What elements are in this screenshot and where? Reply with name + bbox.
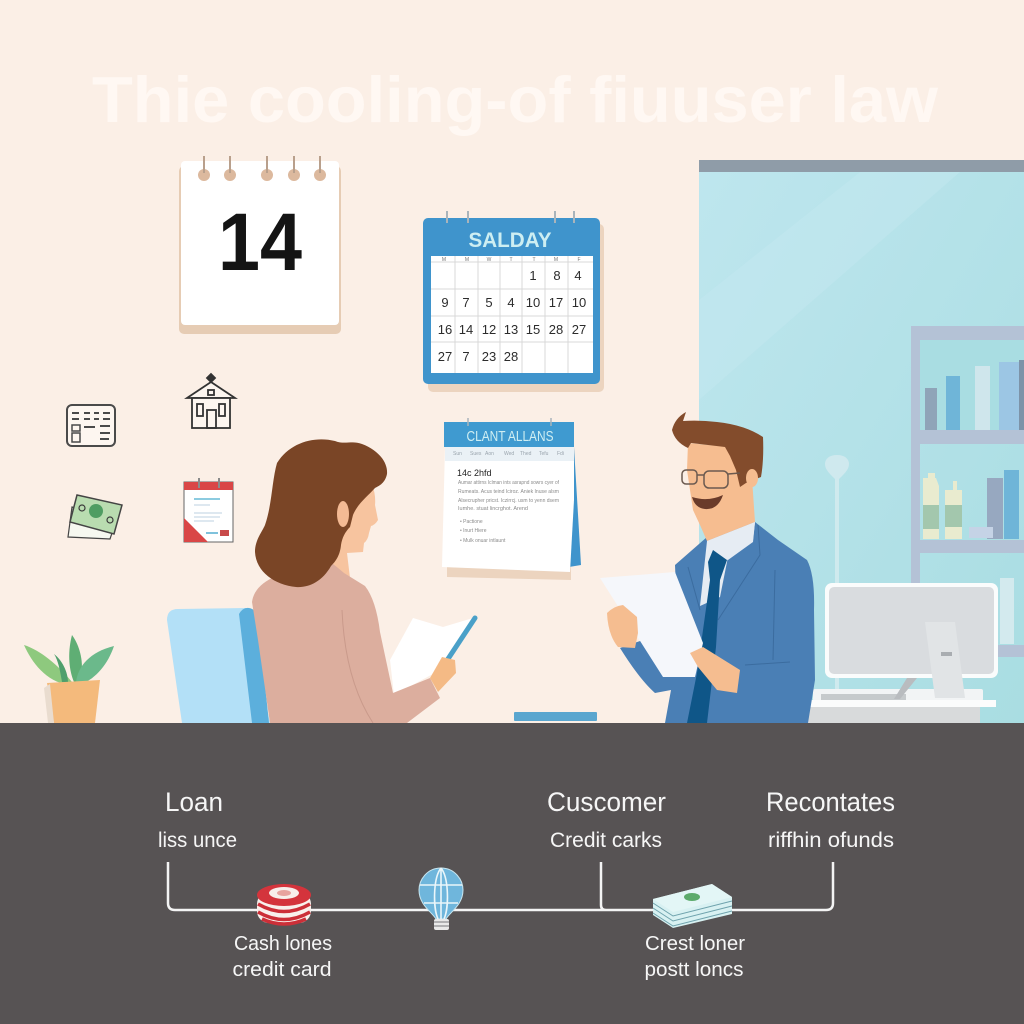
label: crest loans: Crest loner xyxy=(645,933,745,955)
weekday labels: M xyxy=(554,257,558,263)
head and neck xyxy=(687,443,755,541)
label: crest loans: postt loncs xyxy=(644,959,744,981)
label: customer: Credit carks xyxy=(550,829,662,852)
paper xyxy=(390,618,473,695)
ear xyxy=(337,501,349,527)
date numbers: 7 xyxy=(462,349,470,364)
note body text xyxy=(458,480,560,544)
weekday labels: T xyxy=(509,257,513,263)
weekday labels: Thed xyxy=(520,451,532,457)
date numbers: 4 xyxy=(574,268,582,283)
left hand xyxy=(607,605,638,648)
date numbers: 27 xyxy=(438,349,452,364)
note body text: • Pactione xyxy=(460,519,483,525)
label: customer xyxy=(547,787,666,852)
paper xyxy=(600,572,703,677)
date numbers: 27 xyxy=(572,322,586,337)
man xyxy=(600,412,815,723)
label: recontates xyxy=(766,787,895,852)
bookshelf xyxy=(911,326,1024,657)
label: cash loans: Cash lones xyxy=(234,933,332,955)
collar over neck xyxy=(707,522,755,560)
shirt collar xyxy=(700,522,755,606)
date numbers: 28 xyxy=(549,322,563,337)
calendar: Salday month grid: SALDAY xyxy=(468,229,552,252)
label: cash loans: credit card xyxy=(232,959,332,981)
date numbers: 23 xyxy=(482,349,496,364)
date numbers xyxy=(438,268,586,364)
label: loan: Loan xyxy=(165,787,223,817)
date numbers: 16 xyxy=(438,322,452,337)
weekday labels: T xyxy=(532,257,536,263)
date numbers: 17 xyxy=(549,295,563,310)
note body text: Aumar attirns Iclman ints asrapnd sowrs cyer of xyxy=(458,480,560,486)
date numbers: 15 xyxy=(526,322,540,337)
date numbers: 10 xyxy=(572,295,586,310)
date numbers: 8 xyxy=(553,268,561,283)
weekday labels: Sues xyxy=(470,451,482,457)
date numbers: 4 xyxy=(507,295,515,310)
office window background xyxy=(699,160,1024,723)
date numbers: 10 xyxy=(526,295,540,310)
date numbers: 7 xyxy=(462,295,470,310)
icon: red calendar xyxy=(184,478,233,542)
ear xyxy=(746,469,758,487)
weekday labels: M xyxy=(465,257,469,263)
hair xyxy=(255,439,387,587)
icon: red chip stack xyxy=(257,884,311,924)
calendar rings xyxy=(198,156,326,181)
date numbers: 1 xyxy=(529,268,537,283)
calendar: 14 days: 14 xyxy=(218,197,302,288)
label: crest loans xyxy=(644,933,745,981)
note body text: • Mulk onuar intlaunt xyxy=(460,538,506,544)
label: loan: liss unce xyxy=(158,829,237,852)
hand xyxy=(430,657,456,692)
label: loan xyxy=(158,787,237,852)
floor lamp xyxy=(825,455,849,690)
chair xyxy=(167,608,270,723)
label: customer: Cuscomer xyxy=(547,787,666,817)
computer monitor and desk xyxy=(786,583,998,723)
note body text: Rumeats. Acus teind Iciroz. Aniek Inuse alsm xyxy=(458,489,559,495)
note body text: Iumhe. stuat lincrghot. Arend xyxy=(458,506,528,512)
calendar: client plans note: CLANT ALLANS xyxy=(466,428,554,445)
weekday labels: Fdi xyxy=(557,451,564,457)
weekday labels: Wed xyxy=(504,451,514,457)
weekday labels: M xyxy=(442,257,446,263)
icon: balloon bulb xyxy=(419,868,463,930)
icon: house xyxy=(187,374,235,428)
hair xyxy=(672,412,763,487)
weekday labels: Sun xyxy=(453,451,462,457)
suit xyxy=(620,522,815,723)
weekday labels: Tefu xyxy=(539,451,549,457)
weekday labels: F xyxy=(577,257,581,263)
date numbers: 5 xyxy=(485,295,493,310)
icon: banknotes xyxy=(68,495,122,539)
weekday labels xyxy=(453,451,564,457)
icon: money stack xyxy=(653,884,732,928)
plant xyxy=(24,635,114,723)
date numbers: 13 xyxy=(504,322,518,337)
calendar: 14 days xyxy=(179,156,341,334)
label: recontates: Recontates xyxy=(766,787,895,817)
date numbers: 28 xyxy=(504,349,518,364)
weekday labels xyxy=(442,257,581,263)
weekday labels: W xyxy=(487,257,492,263)
date numbers: 9 xyxy=(441,295,449,310)
weekday labels: Aon xyxy=(485,451,494,457)
calendar: client plans note xyxy=(442,418,581,580)
label: recontates: riffhin ofunds xyxy=(768,829,894,852)
neck and face xyxy=(325,484,378,578)
note body text: Alsecrupher pricst. Iczirrcj. usm to yenn dsem xyxy=(458,498,559,504)
tablet edge xyxy=(444,618,475,665)
note body text: • Inurt Hiere xyxy=(460,528,487,534)
mouth xyxy=(692,495,723,509)
woman xyxy=(167,439,475,723)
label: cash loans xyxy=(232,933,332,981)
icon: form card xyxy=(67,405,115,446)
panel: dark footer xyxy=(0,723,1024,1024)
glasses xyxy=(682,470,740,488)
sweater xyxy=(252,564,440,723)
tie xyxy=(687,550,727,723)
calendar: client plans note: 14c 2hfd xyxy=(457,468,492,478)
date numbers: 12 xyxy=(482,322,496,337)
blue tray on desk xyxy=(514,712,597,721)
calendar: Salday month grid xyxy=(423,211,604,392)
timeline line xyxy=(168,862,833,910)
title: Thie cooling-of fiuuser law xyxy=(92,63,938,136)
date numbers: 14 xyxy=(459,322,473,337)
right hand xyxy=(690,647,740,693)
